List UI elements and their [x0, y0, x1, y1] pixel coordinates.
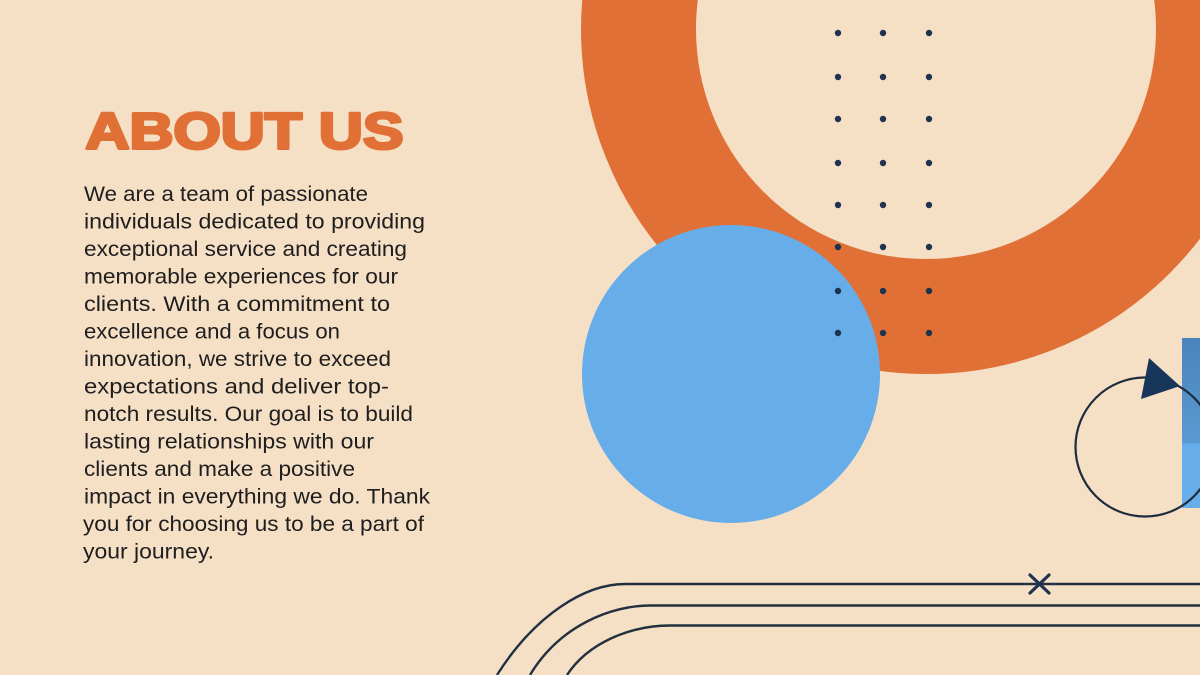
body text: We are a team of passionate [84, 183, 368, 206]
title: ABOUT US [86, 102, 404, 160]
curved lines [497, 584, 1200, 675]
body text: exceptional service and creating [84, 238, 407, 261]
body text: you for choosing us to be a part of [83, 513, 424, 536]
body text: memorable experiences for our [84, 266, 398, 288]
body text: notch results. Our goal is to build [84, 403, 413, 426]
x mark [1030, 575, 1049, 593]
body text: clients. With a commitment to [84, 293, 390, 316]
blue circle [582, 225, 880, 523]
orange ring [638, 0, 1200, 316]
dot grid [835, 30, 932, 336]
body text: innovation, we strive to exceed [84, 348, 391, 371]
blue rectangle at right edge [1182, 338, 1200, 508]
body text: impact in everything we do. Thank [84, 486, 431, 508]
body text: excellence and a focus on [84, 320, 340, 344]
body text: lasting relationships with our [84, 430, 374, 454]
body text: individuals dedicated to providing [84, 210, 425, 234]
circular arrow icon [1076, 358, 1200, 516]
body text: clients and make a positive [84, 458, 355, 481]
body text: expectations and deliver top- [84, 376, 389, 398]
body text: your journey. [83, 540, 214, 564]
body text [83, 183, 431, 564]
